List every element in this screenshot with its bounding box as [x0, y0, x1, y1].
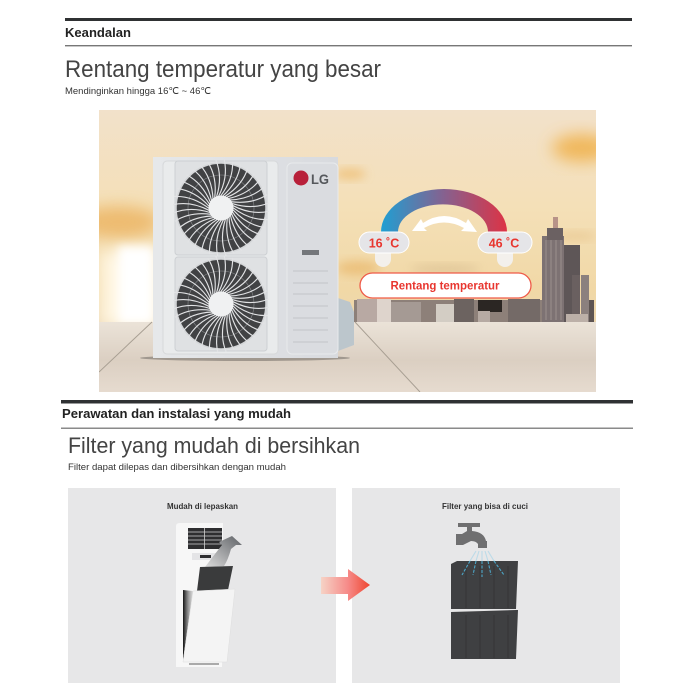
unit body [153, 157, 338, 358]
label: Rentang temperatur: Rentang temperatur [390, 280, 500, 292]
outdoor unit [140, 153, 354, 361]
heading: Rentang temperatur yang besar: Rentang temperatur yang besar [65, 56, 381, 83]
indoor unit illustration [176, 523, 242, 667]
subheading: cooling range: Mendinginkan hingga 16℃ ~ 46℃ [65, 86, 211, 97]
filter sheet [197, 566, 233, 591]
label: 46°C: 46 ˚C [489, 236, 519, 250]
inner shadow [183, 590, 193, 660]
sun glow [99, 246, 159, 328]
panel: easy to remove [68, 488, 336, 683]
rooftop floor [99, 322, 596, 392]
side service panel [287, 163, 338, 354]
top vent [188, 528, 222, 549]
base slot [189, 663, 219, 665]
label: 46°C [478, 232, 532, 253]
louvers [293, 271, 328, 342]
arrow between panels [321, 569, 370, 601]
caption: Filter yang bisa di cuci: Filter yang bisa di cuci [442, 501, 528, 511]
stacked filters [451, 561, 518, 659]
fan: top [174, 160, 268, 256]
second section header: Perawatan dan instalasi yang mudah [61, 400, 633, 429]
subheading: filter removal: Filter dapat dilepas dan dibersihkan dengan mudah [68, 462, 286, 473]
second section header: Perawatan dan instalasi yang mudah: Perawatan dan instalasi yang mudah [62, 406, 291, 421]
side box [338, 298, 354, 351]
top section header: Keandalan [65, 18, 632, 46]
temperature gauge arc [381, 189, 507, 232]
label: Rentang temperatur [360, 273, 531, 298]
tabs under temperature labels [375, 254, 513, 267]
cabinet [176, 523, 223, 667]
label: 16°C: 16 ˚C [369, 236, 399, 250]
removal arrow [205, 536, 242, 567]
display [192, 553, 218, 560]
water spray [462, 551, 504, 577]
filter: lower [451, 610, 518, 659]
panel: washable filter [352, 488, 620, 683]
sky background [99, 110, 596, 322]
icon: water tap [456, 523, 487, 548]
filter: upper [451, 561, 518, 609]
clouds [76, 134, 612, 275]
label: 16°C [359, 232, 409, 253]
top section header: Keandalan: Keandalan [65, 25, 131, 40]
LG logo: LG [311, 171, 329, 187]
unit shadow [140, 356, 350, 361]
fan: bottom [174, 256, 268, 352]
LG logo [294, 170, 328, 186]
double-headed white arrow [412, 216, 477, 232]
heading: Filter yang mudah di bersihkan: Filter yang mudah di bersihkan [68, 433, 360, 458]
front panel [183, 589, 235, 662]
caption: Mudah di lepaskan: Mudah di lepaskan [167, 501, 238, 511]
distant city skyline [354, 299, 544, 322]
vent slot [302, 250, 319, 255]
floor seams [99, 322, 420, 392]
skyscrapers [542, 217, 594, 322]
panel: rooftop scene with outdoor unit [76, 110, 612, 392]
